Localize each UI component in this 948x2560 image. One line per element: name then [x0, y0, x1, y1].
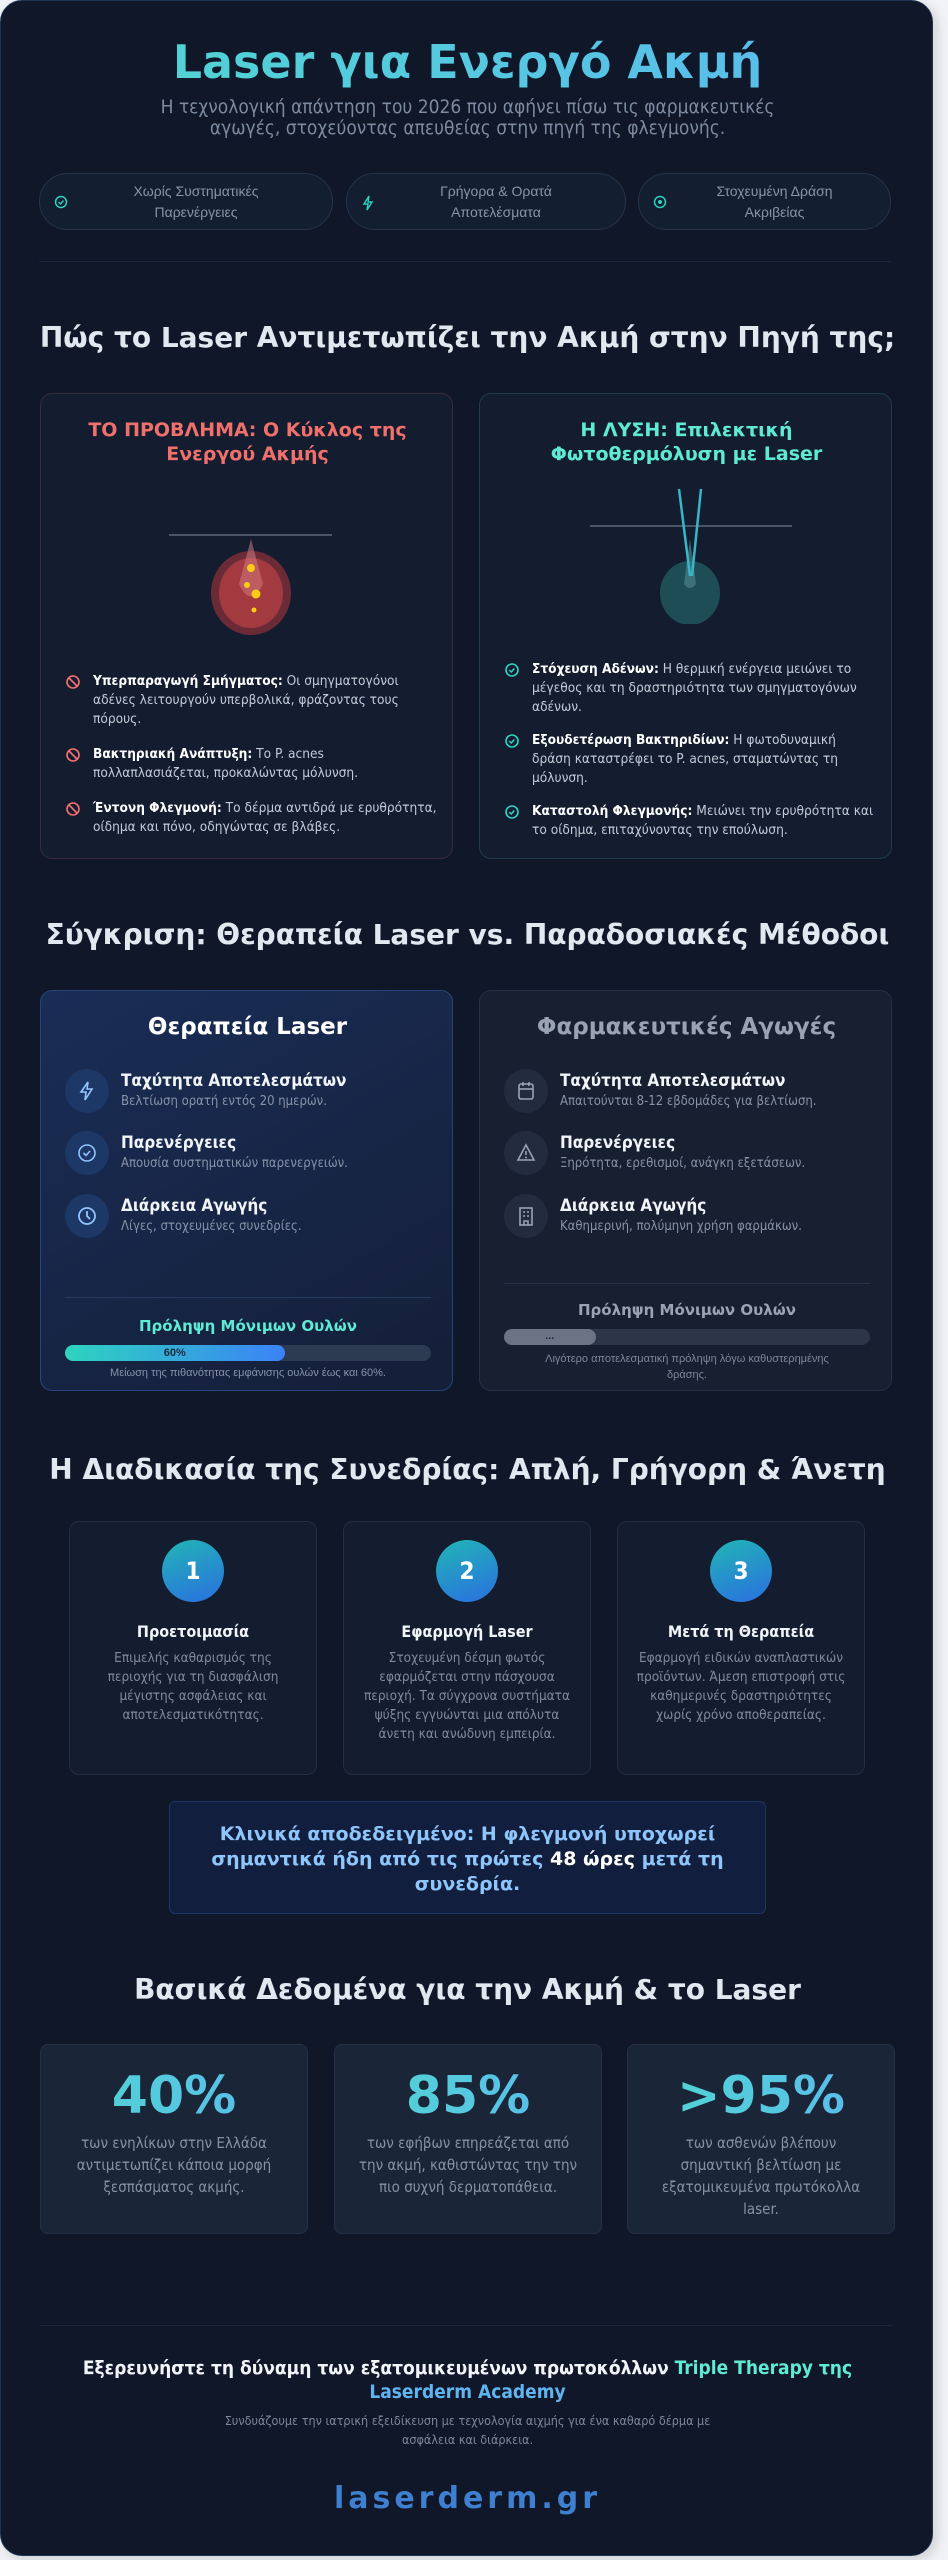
CTA subtext: ασφάλεια και διάρκεια. [402, 2432, 533, 2447]
problem title: ΤΟ ΠΡΟΒΛΗΜΑ: Ο Κύκλος της [88, 419, 407, 441]
row: speed [65, 1069, 346, 1113]
medication panel title: Φαρμακευτικές Αγωγές [537, 1014, 836, 1040]
heading: how laser works: Πώς το Laser Αντιμετωπίζει την Ακμή στην Πηγή της; [40, 321, 895, 354]
step 2: 2 [459, 1557, 475, 1585]
row: speed [504, 1069, 817, 1113]
callout: clinically proven [169, 1801, 766, 1914]
panel: laser therapy: Παρενέργειες [121, 1133, 236, 1153]
CTA subtext: Συνδυάζουμε την ιατρική εξειδίκευση με τεχνολογία αιχμής για ένα καθαρό δέρμα με [225, 2413, 710, 2428]
row: duration [504, 1194, 802, 1238]
solution title: Η ΛΥΣΗ: Επιλεκτική [580, 419, 793, 441]
panel: medication [479, 990, 892, 1391]
panel: medication: Καθημερινή, πολύμηνη χρήση φαρμάκων. [560, 1219, 802, 1234]
panel: medication: Διάρκεια Αγωγής [560, 1196, 706, 1216]
step 1: Επιμελής καθαρισμός της περιοχής για τη διασφάλιση μέγιστης ασφάλειας και αποτελεσματικότητας. [108, 1650, 278, 1723]
stat: 40% [40, 2044, 308, 2234]
list: problem points [66, 673, 437, 835]
scar prevention bar (meds): ... [545, 1330, 554, 1342]
scar prevention bar: 60% [164, 1347, 186, 1359]
title: Laser για Ενεργό Ακμή [173, 35, 762, 89]
heading: session process: Η Διαδικασία της Συνεδρίας: Απλή, Γρήγορη & Άνετη [49, 1453, 886, 1486]
panel: medication: Παρενέργειες [560, 1133, 675, 1153]
scar prevention bar: Πρόληψη Μόνιμων Ουλών [139, 1317, 357, 1335]
pill: no side effects [39, 173, 333, 230]
item: sebum: Υπερπαραγωγή Σμήγματος: Οι σμηγματογόνοι αδένες λειτουργούν υπερβολικά, φράζοντας τους πόρους. [93, 673, 399, 727]
heading: key data: Βασικά Δεδομένα για την Ακμή & το Laser [134, 1973, 801, 2006]
step 3: Μετά τη Θεραπεία [668, 1622, 814, 1641]
step 1 [69, 1521, 317, 1775]
scar prevention bar (meds): Λιγότερο αποτελεσματική πρόληψη λόγω καθυστερημένης δράσης. [545, 1353, 829, 1381]
panel: laser therapy: Βελτίωση ορατή εντός 20 ημερών. [121, 1094, 327, 1109]
scar prevention bar: Μείωση της πιθανότητας εμφάνισης ουλών έως και 60%. [110, 1367, 386, 1379]
row: side effects [504, 1131, 805, 1175]
panel: medication: Ταχύτητα Αποτελεσμάτων [560, 1071, 785, 1091]
scar prevention bar (meds) [504, 1301, 870, 1381]
row: side effects [65, 1131, 348, 1175]
panel: laser therapy: Ταχύτητα Αποτελεσμάτων [121, 1071, 346, 1091]
pill: targeted action: Στοχευμένη Δράση [716, 182, 833, 198]
step 2 [343, 1521, 591, 1775]
step 2: Στοχευμένη δέσμη φωτός εφαρμόζεται στην πάσχουσα περιοχή. Τα σύγχρονα συστήματα ψύξης εγγυώνται μια απόλυτα άνετη και ανώδυνη εμπειρία. [364, 1650, 570, 1742]
panel: laser therapy: Λίγες, στοχευμένες συνεδρίες. [121, 1219, 302, 1234]
step 1: Προετοιμασία [137, 1622, 249, 1641]
stat: >95%: >95% [677, 2066, 845, 2126]
step 3 [617, 1521, 865, 1775]
step 3: 3 [733, 1557, 749, 1585]
laser panel title: Θεραπεία Laser [148, 1014, 347, 1040]
CTA subtext [225, 2413, 710, 2447]
pill: fast results: Αποτελέσματα [451, 204, 541, 220]
subtitle: αγωγές, στοχεύοντας απευθείας στην πηγή της φλεγμονής. [210, 117, 725, 139]
pill: no side effects: Παρενέργειες [155, 204, 237, 220]
list: solution points [505, 661, 873, 838]
stat: 85% [334, 2044, 602, 2234]
stat: 40%: των ενηλίκων στην Ελλάδα αντιμετωπίζει κάποια μορφή ξεσπάσματος ακμής. [77, 2134, 271, 2196]
title [1, 35, 934, 89]
illustration: inflamed pore [169, 534, 332, 635]
stat: 85%: των εφήβων επηρεάζεται από την ακμή, καθιστώντας την την πιο συχνή δερματοπάθεια. [359, 2134, 577, 2196]
stat: 85%: 85% [406, 2066, 530, 2126]
scar prevention bar [65, 1317, 431, 1379]
pill: fast results [346, 173, 626, 230]
solution title: Φωτοθερμόλυση με Laser [551, 443, 822, 465]
row: duration [65, 1194, 302, 1238]
panel: solution [479, 393, 892, 859]
stat: 40%: 40% [112, 2066, 236, 2126]
subtitle: Η τεχνολογική απάντηση του 2026 που αφήνει πίσω τις φαρμακευτικές [161, 96, 774, 118]
panel: laser therapy [40, 990, 453, 1391]
pill: no side effects: Χωρίς Συστηματικές [133, 182, 259, 198]
item: bacteria: Βακτηριακή Ανάπτυξη: Το P. acnes πολλαπλασιάζεται, προκαλώντας μόλυνση. [93, 746, 358, 781]
item: bacteria neutralisation: Εξουδετέρωση Βακτηριδίων: Η φωτοδυναμική δράση καταστρέφει το P. acnes, σταματώντας τη μόλυνση. [532, 732, 838, 786]
stat: >95% [627, 2044, 895, 2234]
CTA text: Εξερευνήστε τη δύναμη των εξατομικευμένων πρωτοκόλλων Triple Therapy της Laserderm Academy [83, 2357, 852, 2403]
panel: problem [40, 393, 453, 859]
panel: medication: Απαιτούνται 8-12 εβδομάδες για βελτίωση. [560, 1094, 817, 1109]
panel: laser therapy: Διάρκεια Αγωγής [121, 1196, 267, 1216]
brand: laserderm.gr: laserderm.gr [334, 2481, 601, 2516]
item: inflammation: Έντονη Φλεγμονή: Το δέρμα αντιδρά με ερυθρότητα, οίδημα και πόνο, οδηγώντας σε βλάβες. [93, 800, 437, 835]
item: inflammation suppression: Καταστολή Φλεγμονής: Μειώνει την ερυθρότητα και το οίδημα, επιταχύνοντας την επούλωση. [532, 803, 873, 838]
pill: targeted action [638, 173, 891, 230]
panel: laser therapy: Απουσία συστηματικών παρενεργειών. [121, 1156, 348, 1171]
step 2: Εφαρμογή Laser [401, 1622, 533, 1641]
pill: targeted action: Ακριβείας [745, 204, 804, 220]
step 1: 1 [185, 1557, 201, 1585]
step 3: Εφαρμογή ειδικών αναπλαστικών προϊόντων. Άμεση επιστροφή στις καθημερινές δραστηριότητες χωρίς χρόνο αποθεραπείας. [637, 1650, 845, 1723]
solution title [551, 419, 822, 465]
illustration: laser beams on gland [590, 488, 792, 624]
heading: comparison: Σύγκριση: Θεραπεία Laser vs. Παραδοσιακές Μέθοδοι [46, 918, 889, 951]
problem title: Ενεργού Ακμής [166, 443, 329, 465]
panel: medication: Ξηρότητα, ερεθισμοί, ανάγκη εξετάσεων. [560, 1156, 805, 1171]
item: glands: Στόχευση Αδένων: Η θερμική ενέργεια μειώνει το μέγεθος και τη δραστηριότητα των σμηγματογόνων αδένων. [532, 661, 857, 715]
pill: fast results: Γρήγορα & Ορατά [440, 182, 552, 198]
stat: >95%: των ασθενών βλέπουν σημαντική βελτίωση με εξατομικευμένα πρωτόκολλα laser. [662, 2134, 860, 2218]
scar prevention bar (meds): Πρόληψη Μόνιμων Ουλών [578, 1301, 796, 1319]
problem title [88, 419, 407, 465]
callout: clinically proven: Κλινικά αποδεδειγμένο: Η φλεγμονή υποχωρεί σημαντικά ήδη από τις πρώτες 48 ώρες μετά τη συνεδρία. [211, 1823, 724, 1895]
subtitle [161, 96, 774, 139]
